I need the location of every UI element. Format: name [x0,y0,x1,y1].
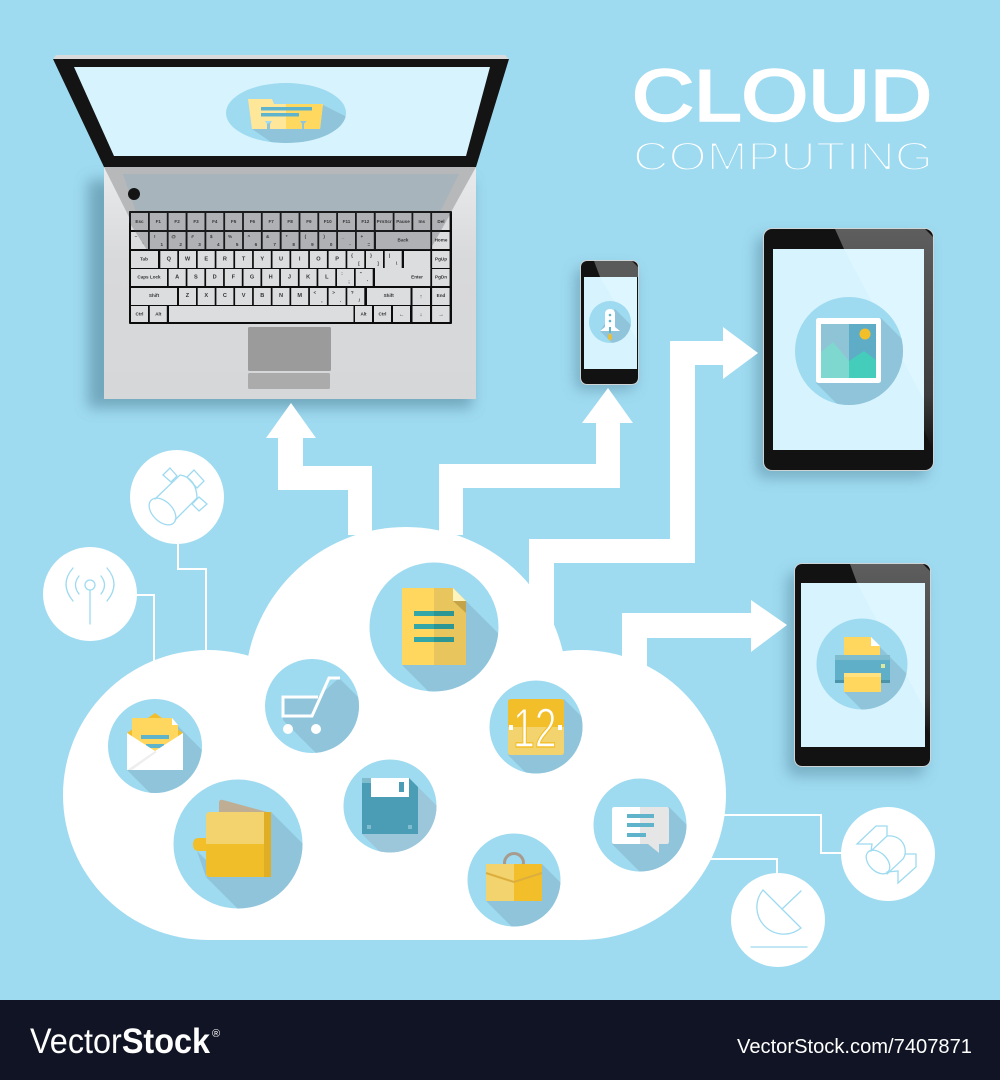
keyboard: F7 [269,219,274,224]
keyboard: F1 [156,219,161,224]
keyboard: : [341,271,343,276]
keyboard: 1 [161,242,164,247]
keyboard: M [297,293,302,299]
keyboard: | [389,253,390,258]
icon disc [490,680,582,774]
keyboard: Pause [396,219,410,224]
footer url: VectorStock.com/7407871 [737,1036,972,1058]
keyboard: E [204,256,208,262]
lid top edge [53,55,509,59]
keyboard: Alt [155,312,162,316]
icon disc [108,699,202,793]
arrow to small tablet [622,600,787,672]
chat bubble icon [594,778,686,872]
keyboard: ← [399,312,404,318]
keyboard: P [335,256,339,262]
keyboard: ) [323,234,325,239]
keyboard: J [288,274,291,280]
arrow to laptop [266,403,372,535]
keyboard: 2 [179,242,182,247]
keyboard: Z [186,293,190,299]
keyboard: ' [367,279,368,284]
keyboard: Back [398,238,409,242]
keyboard: . [340,298,341,303]
keyboard: 7 [273,242,276,247]
satellite icon [130,450,224,544]
antenna icon [43,547,137,641]
keyboard: N [279,293,283,299]
envelope icon [108,699,202,793]
keyboard: < [314,290,317,295]
power button [128,188,140,200]
keyboard: Alt [360,312,367,316]
icon disc [344,760,436,852]
keyboard: End [437,293,446,298]
keyboard: W [185,256,191,262]
keyboard: F8 [287,219,293,224]
keyboard: ~ [135,234,138,239]
keyboard: ] [377,261,379,266]
keyboard: D [213,274,217,280]
tablet screen [801,583,925,747]
printer app icon [816,618,908,710]
connector lines [136,544,842,875]
keyboard: Shift [384,293,394,298]
keyboard: V [242,293,246,299]
subtitle word: computing: COMPUTING [633,135,933,179]
keyboard: ? [351,290,354,295]
floppy disk icon [344,760,436,852]
laptop drop shadow [88,180,472,408]
laptop lid [53,59,509,167]
keyboard: S [194,274,198,280]
arrow to phone [439,388,633,535]
keyboard: I [299,256,301,262]
calendar date number: 12 [513,697,557,760]
keyboard: G [250,274,254,280]
tablet shadow [787,572,925,776]
satellite dish icon [731,873,825,967]
icon disc [795,297,903,405]
icon disc [174,780,302,908]
keyboard: Home [435,238,448,242]
keyboard: Esc [135,219,144,224]
keyboard: " [360,271,362,276]
keyboard: F2 [174,219,180,224]
keyboard: % [228,234,232,239]
keyboard: [ [358,261,360,266]
tablet shadow [756,236,928,478]
keyboard: Tab [140,256,148,262]
registered mark: ® [212,1028,220,1040]
keyboard: / [359,298,361,303]
keyboard: F11 [343,219,351,224]
keyboard: = [367,242,370,247]
title word: cloud: CLOUD [632,55,932,136]
keyboard: A [175,274,179,280]
keyboard: ↑ [420,294,423,300]
icon disc [589,301,631,343]
keyboard: 5 [236,242,239,247]
keyboard: F10 [324,219,332,224]
keyboard: Del [437,219,445,224]
icon disc [468,834,560,926]
icon disc [841,807,935,901]
keyboard: F12 [361,219,370,224]
keyboard: T [242,256,246,262]
keyboard [129,211,452,324]
keyboard: F4 [212,219,218,224]
rotating cylinder icon [841,807,935,901]
tablet screen [773,249,924,450]
briefcase icon [468,834,560,926]
keyboard: ! [154,234,156,239]
phone screen [584,277,637,369]
keyboard: PrnScr [377,219,392,224]
keyboard: _ [341,234,345,239]
icon disc [43,547,137,641]
icon disc [370,562,498,692]
keyboard: K [306,274,310,280]
palm shadow band [123,174,459,212]
lid shadow on base [104,167,476,255]
keyboard: H [269,274,273,280]
icon disc [226,83,346,143]
keyboard: } [370,253,372,258]
keyboard: F [232,274,236,280]
footer bar [0,1000,1000,1080]
keyboard: * [286,234,288,239]
touchpad [248,327,331,371]
keyboard: + [360,234,363,239]
arrow to large tablet [529,327,758,625]
keyboard: Ctrl [379,312,386,316]
keyboard: Enter [411,274,423,280]
laptop folder app icon [226,83,346,143]
icon disc [731,873,825,967]
keyboard: ( [305,234,307,239]
keyboard: - [349,242,351,247]
keyboard: @ [171,234,176,239]
keyboard: \ [396,261,398,266]
keyboard: > [332,290,335,295]
keyboard: 9 [311,242,314,247]
keyboard: 3 [198,242,201,247]
keyboard: F6 [250,219,256,224]
keyboard: , [321,298,323,303]
keyboard: Y [260,256,264,262]
keyboard: B [260,293,264,299]
keyboard: R [223,256,227,262]
laptop base [104,167,476,399]
laptop [53,55,509,408]
icon disc [130,450,224,544]
calendar icon [490,680,582,774]
keyboard: F5 [231,219,237,224]
tablet small [787,563,931,776]
keyboard: $ [210,234,213,239]
icon disc [265,659,359,753]
keyboard: 4 [217,242,220,247]
cart icon [265,659,359,753]
keyboard: # [191,234,194,239]
title [632,55,933,179]
keyboard: O [316,256,321,262]
document icon [370,562,498,692]
keyboard: U [279,256,283,262]
keyboard: F9 [306,219,312,224]
keyboard: F3 [193,219,199,224]
keyboard: → [438,312,444,318]
keyboard: PgUp [435,256,447,262]
icon disc [816,618,908,710]
rocket app icon [589,301,631,343]
keyboard: Shift [149,293,160,298]
laptop screen [74,67,490,156]
keyboard: ; [348,279,350,284]
keyboard: PgDn [435,274,447,280]
footer logo: VectorStock [30,1022,210,1061]
keyboard: 8 [292,242,295,247]
keyboard: { [351,253,353,258]
keyboard: L [325,274,329,280]
folder icon [174,780,302,908]
keyboard: Ctrl [136,312,143,316]
phone [575,260,645,390]
keyboard: ` [142,242,144,247]
keyboard: ↓ [420,312,423,318]
icon disc [594,778,686,872]
touchpad button [248,373,330,389]
keyboard: 0 [330,242,333,247]
phone shadow [575,268,635,390]
keyboard: & [266,234,270,239]
picture app icon [795,297,903,405]
keyboard: 6 [255,242,258,247]
keyboard: Caps Lock [137,274,161,280]
keyboard: Ins [418,219,426,224]
keyboard: Q [167,256,172,262]
keyboard: X [204,293,208,299]
cloud [63,527,726,940]
keyboard: C [223,293,227,299]
tablet large [756,228,961,478]
keyboard: ^ [248,234,251,239]
